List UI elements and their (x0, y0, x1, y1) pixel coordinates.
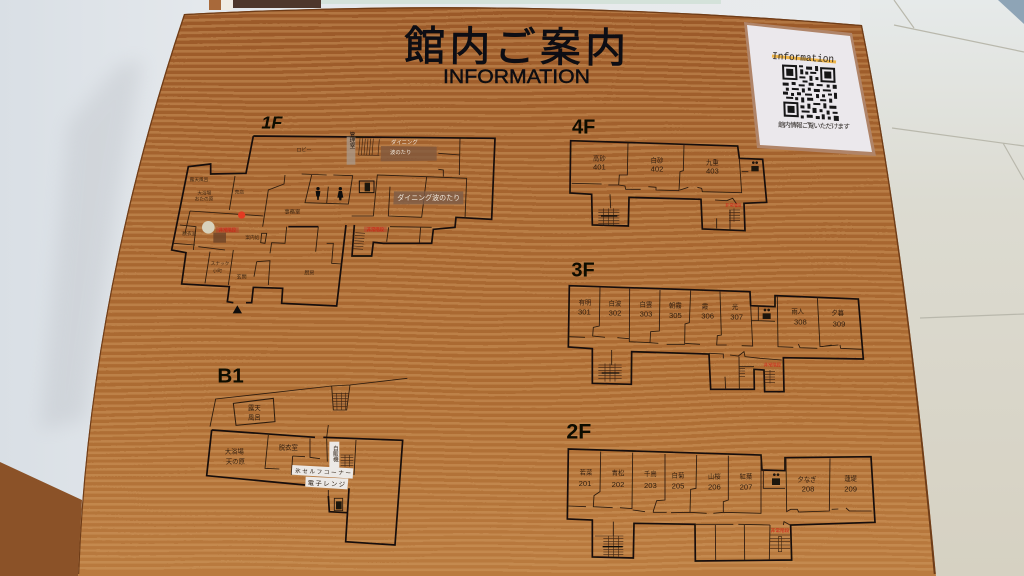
room labels: 露天風呂 (190, 177, 209, 183)
stairs (353, 138, 379, 249)
rooms: 403 (706, 167, 719, 176)
stair block (341, 455, 353, 467)
floor plan: 2F (566, 419, 875, 561)
interior walls (568, 452, 872, 560)
upper terrace outline (210, 378, 407, 437)
room labels: おたの原 (195, 196, 214, 203)
room labels: 脱衣室 (279, 442, 298, 451)
microwave plate: 電子レンジ (308, 479, 345, 489)
interior walls (572, 142, 748, 229)
rooms: 401 (593, 163, 606, 172)
emergency stairs label: 非常階段 (764, 361, 782, 368)
rooms: 青松 (612, 468, 625, 477)
stairs west (595, 536, 623, 557)
wall shadow (40, 60, 143, 430)
stairs east (765, 370, 775, 383)
wooden floor bottom left (0, 462, 82, 576)
dining label panels (381, 146, 437, 161)
rooms: 九重 (706, 158, 719, 167)
rooms: 紅葉 (740, 471, 753, 480)
background objects behind board (209, 0, 721, 10)
rooms: 207 (740, 483, 752, 492)
dining text second: 波のたり (390, 148, 411, 156)
rooms: 霞 (702, 302, 709, 310)
rooms: 205 (672, 482, 684, 491)
title (404, 23, 626, 88)
rooms: 309 (833, 319, 845, 328)
rooms: 夕暮 (831, 308, 845, 317)
rooms: 301 (578, 308, 591, 317)
outer walls (207, 430, 403, 545)
round bath marker (202, 221, 215, 234)
rooms: 302 (609, 309, 621, 318)
label 2F: 2F (566, 419, 591, 443)
stairs center (739, 368, 745, 376)
rooms: 208 (802, 485, 814, 494)
label 1F: 1F (261, 113, 283, 133)
elevator symbol (359, 181, 374, 193)
label B1: B1 (217, 365, 244, 388)
interior walls (569, 287, 862, 389)
elevator symbol (763, 309, 771, 319)
rooms: 306 (701, 312, 714, 321)
rooms: 千鳥 (644, 469, 657, 478)
room labels: 玄関 (237, 273, 247, 280)
rooms: 203 (644, 481, 657, 490)
floor tiles on the right (860, 0, 1024, 576)
rooms: 307 (730, 312, 743, 321)
emergency stairs label: 非常階段 (725, 202, 741, 208)
laminate border (744, 22, 876, 156)
outer walls (568, 286, 863, 392)
you are here marker (238, 211, 245, 219)
room labels (182, 147, 314, 280)
self corner plate: 氷セルフコーナー (295, 467, 352, 477)
dining text large: ダイニング波のたり (397, 193, 460, 202)
outer walls (567, 449, 875, 561)
rooms: 201 (579, 479, 591, 488)
outer walls (570, 141, 767, 231)
stairs east (770, 535, 790, 552)
room labels: 事務室 (284, 208, 301, 216)
emergency exit labels: 非常階段 (219, 227, 237, 234)
dining text top: ダイニング (391, 138, 418, 146)
label 3F: 3F (571, 259, 595, 281)
rooms: 402 (651, 165, 663, 174)
stairs west (598, 363, 622, 382)
rooms: 202 (612, 480, 624, 489)
yellow underline (772, 56, 836, 62)
emergency exit labels (216, 226, 387, 234)
stairs west (598, 208, 619, 225)
microwave plate (305, 477, 348, 489)
rooms: 305 (669, 311, 682, 320)
emergency stairs label: 非常階段 (771, 527, 790, 534)
floor plan: B1 (207, 365, 407, 545)
floor plan: 3F (568, 259, 863, 392)
room labels: 小町 (213, 268, 222, 275)
floor plan: 1F (172, 113, 495, 313)
interior walls (173, 138, 467, 285)
stairs east (729, 208, 740, 222)
label 4F: 4F (572, 116, 595, 138)
rooms: 209 (844, 484, 857, 493)
entrance triangle (233, 305, 242, 313)
rooms: 206 (708, 482, 721, 491)
heading: Japanese: 館内ご案内 (404, 23, 626, 71)
toilets (316, 187, 343, 200)
self corner plate (292, 465, 353, 479)
emergency exit labels: 非常階段 (367, 226, 385, 233)
women icon (337, 187, 343, 200)
room labels: 大浴場 (225, 446, 244, 455)
rooms: 白波 (609, 298, 622, 307)
room labels: 脱衣室 (182, 230, 197, 237)
open-air bath room: 風呂 (248, 413, 261, 421)
rooms (579, 467, 858, 494)
room labels: 大浴場 (197, 189, 212, 196)
rooms: 光 (732, 302, 739, 311)
room labels: 案内処 (245, 234, 260, 241)
heading: English: INFORMATION (443, 66, 590, 88)
rooms: 303 (640, 309, 652, 318)
open-air bath room (233, 398, 275, 425)
QR code (782, 64, 839, 121)
rooms: 高砂 (593, 154, 606, 163)
rooms: 若菜 (580, 467, 593, 476)
elevator symbol (334, 498, 343, 511)
stair block (213, 233, 226, 243)
rooms: 有明 (579, 297, 591, 306)
rooms (593, 154, 719, 176)
sheet heading: Information (772, 51, 834, 66)
dining panel large (393, 191, 463, 204)
outer walls (172, 136, 495, 306)
room labels: 厨房 (304, 271, 314, 277)
room labels: スナック (211, 261, 230, 267)
QR information sheet (744, 22, 876, 156)
room labels: ロビー (297, 147, 311, 154)
rooms: 山桜 (708, 471, 721, 480)
room labels: 売店 (235, 188, 244, 195)
interior walls (265, 435, 356, 496)
rooms: 蓮堤 (844, 474, 858, 483)
vending plate (329, 442, 339, 468)
room labels: 天の原 (226, 458, 245, 466)
control room plate (347, 137, 355, 165)
floor plan: 4F (570, 116, 767, 231)
room labels (225, 442, 298, 466)
men icon (316, 187, 320, 200)
rooms: 夕なぎ (798, 474, 817, 483)
sheet caption: 館内情報ご覧いただけます (778, 120, 850, 131)
rooms: 朝霧 (669, 301, 682, 309)
rooms (578, 297, 845, 328)
elevator symbol (772, 473, 780, 485)
rooms: 白雲 (640, 299, 652, 308)
elevator symbol (751, 161, 759, 171)
rooms: 白砂 (651, 156, 664, 165)
control room text: 管理室 (348, 130, 355, 149)
rooms: 308 (794, 318, 807, 327)
rooms: 雨人 (791, 308, 805, 316)
rooms: 白菊 (672, 470, 684, 479)
paper (747, 25, 872, 152)
vending plate: 自販機 (331, 444, 338, 463)
stairs upper (333, 393, 349, 410)
open-air bath room: 露天 (248, 404, 261, 412)
